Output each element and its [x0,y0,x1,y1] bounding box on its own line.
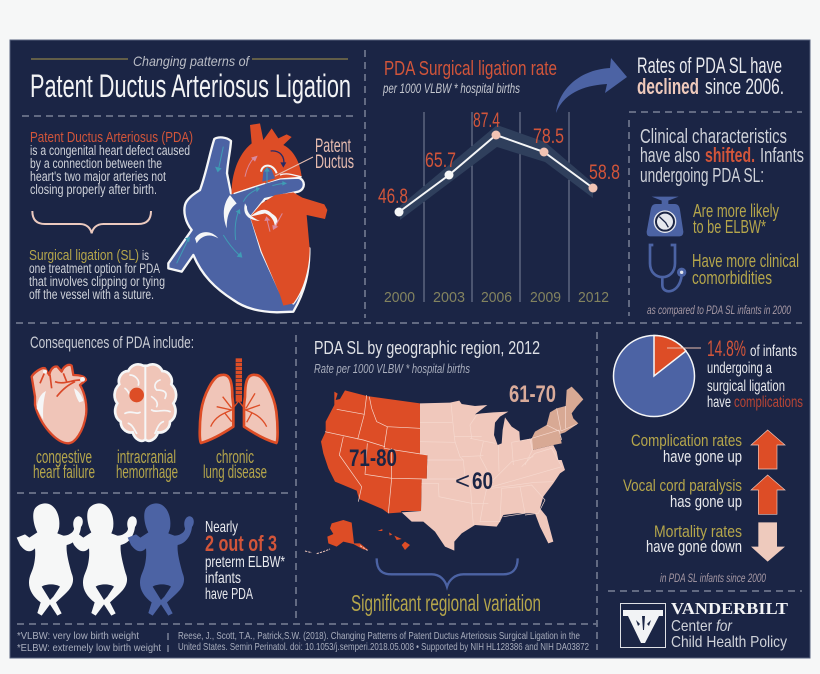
text block: 2 out of 3: preterm ELBW* [205,554,285,571]
citation: Reese, J., Scott, T.A., Patrick,S.W. (2018). Changing Patterns of Patent Ductus Arteriosus Surgical Ligation in the [178,630,580,642]
text block: consequence labels: chronic [216,447,254,467]
arrow: curved blue [556,58,627,113]
Alaska [327,520,368,550]
callout: patent ductus label: Patent [315,136,351,157]
text block: complication rates: Complication rates [631,431,742,450]
chart heading: per 1000 VLBW * hospital births [382,81,520,96]
text block: 2 out of 3: Nearly [205,519,238,536]
text block: more likely ELBW: Are more likely [693,201,779,221]
line chart: surgical ligation rate: 2006 [481,289,512,306]
chart heading [382,58,557,96]
line chart: surgical ligation rate [378,109,620,306]
text block: consequence labels [33,447,267,482]
icon: blue curly brace [377,558,518,587]
callout: patent ductus label: Ductus [315,152,354,173]
text block: 2 out of 3: have PDA [205,586,253,603]
text block: complications: have [707,394,731,411]
text block: surgical ligation definition: that involves clipping or tying [29,274,165,289]
logo: Vanderbilt: Center for [671,618,733,635]
icon: pink curly brace [32,211,151,233]
text block: more likely ELBW [693,201,779,237]
heading: consequences: Consequences of PDA include: [30,333,194,352]
text block: consequence labels: lung disease [203,462,267,482]
text block: mortality rates: have gone down [646,537,742,556]
text block: 2 out of 3: 2 out of 3 [205,531,277,556]
line chart: surgical ligation rate: 65.7 [425,149,456,172]
icon: three infants [17,503,194,616]
text block: consequence labels: hemorrhage [116,462,178,482]
line chart: surgical ligation rate: 2009 [530,289,561,306]
icon: weighing scale [647,197,683,236]
footnotes: abbreviations: *ELBW: extremely low birth weight [17,642,161,654]
map label: under 60 [455,468,493,495]
heading: map: Rate per 1000 VLBW * hospital births [314,362,470,376]
line chart: surgical ligation rate: 46.8 [378,185,408,208]
text block: PDA definition: closing properly after birth. [30,182,157,197]
text block: surgical ligation definition: one treatment option for PDA [29,261,160,276]
note: since 2000: in PDA SL infants since 2000 [660,573,766,585]
title block [30,53,351,104]
text: regional variation: Significant regional variation [351,590,541,616]
line chart: surgical ligation rate: 2000 [384,289,415,306]
text block: complications: undergoing a [707,360,772,377]
text block: clinical characteristics: have also [640,145,700,167]
text block: clinical characteristics: undergoing PDA SL: [640,165,764,187]
map label: 61-70: 61-70 [509,381,556,408]
text block: more likely ELBW: to be ELBW* [693,217,766,237]
footnotes: abbreviations: *VLBW: very low birth weight [17,630,139,642]
footnotes: abbreviations [17,630,161,654]
text block: rates declined [637,53,784,99]
text block: complications: surgical ligation [707,378,785,395]
text block: complications: 14.8% [707,336,746,361]
text block: more comorbidities [692,251,799,288]
map label: under 60: 60 [472,468,493,495]
chart heading: PDA Surgical ligation rate [384,58,557,80]
icon: lungs [200,358,278,443]
text block: consequence labels: intracranial [117,447,176,467]
text block: mortality rates: Mortality rates [654,522,742,541]
text block: complication rates [631,431,742,466]
icon: stethoscope [650,245,686,291]
text block: surgical ligation definition [29,248,165,302]
line chart: surgical ligation rate: 58.8 [589,161,620,184]
line chart: surgical ligation rate: 78.5 [533,125,564,148]
text block: more comorbidities: comorbidities [692,268,772,288]
text block: complications [707,336,803,411]
text block: PDA definition [30,130,193,197]
icon: brain with hemorrhage [115,364,176,441]
text block: 2 out of 3 [205,519,285,603]
line chart: surgical ligation rate: 2003 [433,289,465,306]
logo: Vanderbilt: VANDERBILT [671,599,789,618]
map label: under 60: < [455,468,470,495]
main title: Patent Ductus Arteriosus Ligation [30,68,351,104]
text block: surgical ligation definition: is [142,248,149,263]
text block: rates declined: declined [637,74,699,99]
citation: United States. Semin Perinatol. doi: 10.1053/j.semperi.2018.05.008 • Supported by NIH HL128386 and NIH DA03872 [178,641,589,653]
subtitle: Changing patterns of [133,53,251,69]
text block: mortality rates [646,522,742,556]
logo: Vanderbilt: Child Health Policy [671,634,787,651]
logo: Vanderbilt [620,599,789,651]
line chart: surgical ligation rate: 2012 [578,289,609,306]
text block: PDA definition: is a congenital heart defect caused [30,143,190,158]
text block: PDA definition: heart's two major arteries not [30,169,166,184]
text block: vocal cord paralysis: has gone up [670,492,742,511]
citation [178,630,589,653]
callout: patent ductus label [275,136,354,176]
text block: PDA definition: by a connection between the [30,156,162,171]
text block: consequence labels: heart failure [33,462,95,482]
map label: 71-80: 71-80 [349,445,397,472]
arrow: paralysis up [751,475,785,514]
arrow: complications up [751,430,785,469]
pie chart: complications [614,335,701,416]
icon: congestive heart [32,365,86,443]
text block: surgical ligation definition: off the vessel with a suture. [29,287,154,302]
text block: complication rates: have gone up [663,447,742,466]
text block: clinical characteristics: Infants [760,145,804,167]
text block: clinical characteristics [640,126,804,187]
line chart: surgical ligation rate: 87.4 [473,109,500,132]
text block: PDA definition: Patent Ductus Arteriosus (PDA) [30,130,193,146]
text block: vocal cord paralysis [623,476,742,511]
heading: map [314,338,540,376]
text block: consequence labels: congestive [36,447,92,467]
text block: clinical characteristics: shifted. [705,145,755,167]
icon: heart diagram [168,123,327,312]
text block: 2 out of 3: infants [205,570,241,587]
heading: map: PDA SL by geographic region, 2012 [314,338,540,358]
text block: rates declined: since 2006. [705,74,784,99]
text block: complications: of infants [750,343,797,360]
map: United States by region [305,387,583,554]
Hawaii [378,529,410,550]
text block: vocal cord paralysis: Vocal cord paralysis [623,476,742,495]
arrow: mortality down [751,522,785,562]
text block: surgical ligation definition: Surgical ligation (SL) [29,248,139,264]
